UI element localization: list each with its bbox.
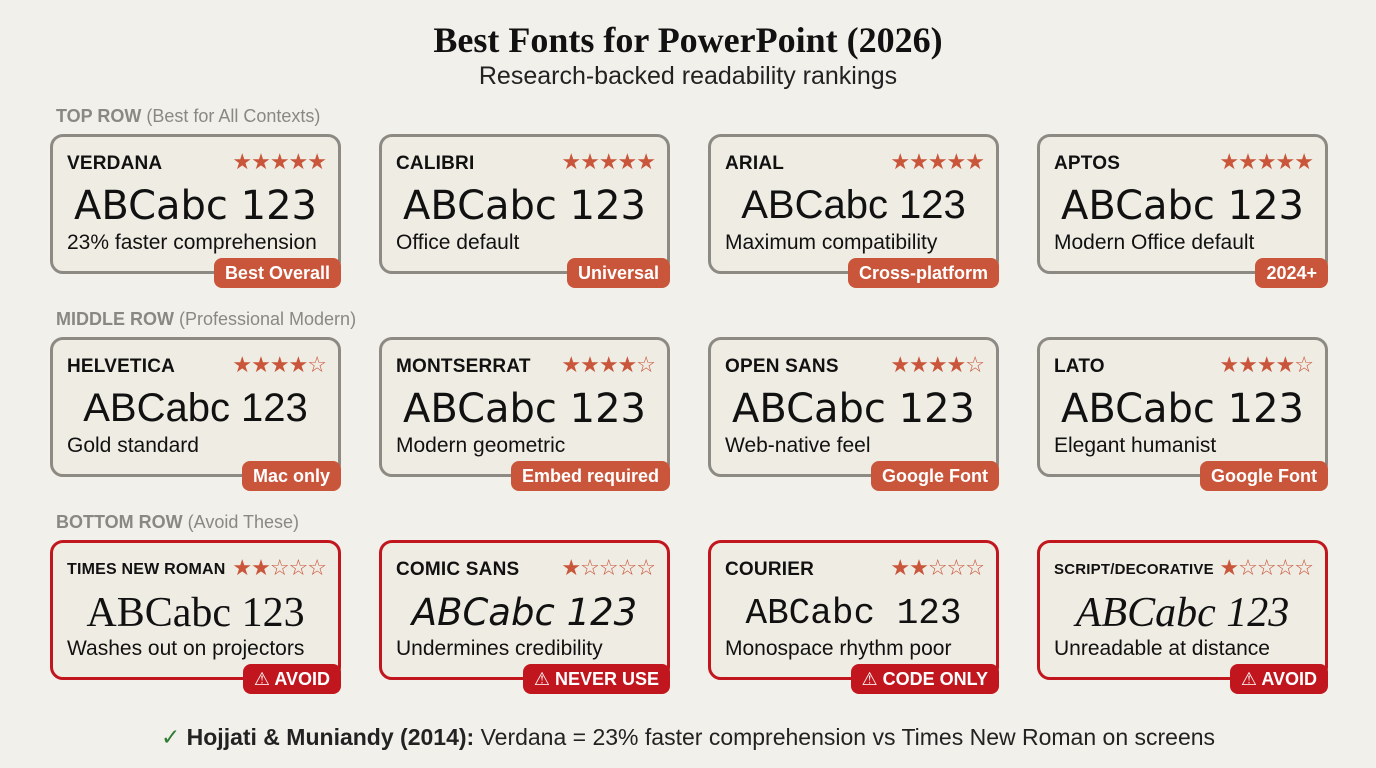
card: Verdana: VERDANA bbox=[67, 153, 162, 174]
card: Script/Decorative: SCRIPT/DECORATIVE bbox=[1054, 561, 1214, 578]
card: Montserrat: ABCabc 123 bbox=[403, 386, 646, 432]
card: Courier: COURIER bbox=[725, 559, 814, 580]
card: Script/Decorative bbox=[1037, 540, 1328, 680]
card: Lato: Elegant humanist bbox=[1054, 434, 1216, 457]
card: Arial: ★★★★★ bbox=[890, 149, 984, 174]
card: Calibri: ABCabc 123 bbox=[403, 183, 646, 229]
card: Verdana: ★★★★★ bbox=[232, 149, 326, 174]
card: Comic Sans: COMIC SANS bbox=[396, 559, 519, 580]
card: Open Sans: Google Font bbox=[882, 466, 988, 486]
card: Aptos: APTOS bbox=[1054, 153, 1120, 174]
row label: top: TOP ROW (Best for All Contexts) bbox=[56, 106, 320, 126]
card: Helvetica: Mac only bbox=[253, 466, 330, 486]
card: Calibri: Office default bbox=[396, 231, 519, 254]
card: Montserrat: Modern geometric bbox=[396, 434, 565, 457]
card: Helvetica: ★★★★☆ bbox=[232, 352, 326, 377]
card: Lato: ★★★★☆ bbox=[1219, 352, 1313, 377]
card: Aptos: ABCabc 123 bbox=[1061, 183, 1304, 229]
card: Calibri: Universal bbox=[578, 263, 659, 283]
card: Times New Roman: ABCabc 123 bbox=[86, 590, 305, 636]
card: Aptos: 2024+ bbox=[1266, 263, 1317, 283]
card: Arial: Cross-platform bbox=[859, 263, 988, 283]
card: Courier: ABCabc 123 bbox=[745, 593, 962, 634]
card: Aptos: ★★★★★ bbox=[1219, 149, 1313, 174]
card: Montserrat: MONTSERRAT bbox=[396, 356, 531, 377]
card: Times New Roman bbox=[50, 540, 341, 680]
footer citation: ✓ Hojjati & Muniandy (2014): Verdana = 23% faster comprehension vs Times New Roman on screens bbox=[161, 724, 1215, 750]
card: Lato: ABCabc 123 bbox=[1061, 386, 1304, 432]
card: Helvetica: HELVETICA bbox=[67, 356, 175, 377]
card: Open Sans: ★★★★☆ bbox=[890, 352, 984, 377]
card: Calibri bbox=[379, 134, 670, 274]
card: Lato: LATO bbox=[1054, 356, 1105, 377]
card: Arial: ABCabc 123 bbox=[741, 183, 966, 227]
card: Arial: ARIAL bbox=[725, 153, 784, 174]
card: Verdana: Best Overall bbox=[225, 263, 330, 283]
card: Calibri: ★★★★★ bbox=[561, 149, 655, 174]
card: Helvetica: ABCabc 123 bbox=[83, 386, 308, 430]
card: Verdana: ABCabc 123 bbox=[74, 183, 317, 229]
card: Comic Sans: ABCabc 123 bbox=[412, 591, 637, 634]
subtitle: Research-backed readability rankings bbox=[479, 62, 897, 90]
card: Times New Roman: TIMES NEW ROMAN bbox=[67, 561, 226, 578]
card: Verdana bbox=[50, 134, 341, 274]
card: Open Sans: Web-native feel bbox=[725, 434, 871, 457]
card: Comic Sans: ★☆☆☆☆ bbox=[561, 555, 655, 580]
card: Lato bbox=[1037, 337, 1328, 477]
card: Open Sans: OPEN SANS bbox=[725, 356, 839, 377]
card: Verdana: 23% faster comprehension bbox=[67, 231, 317, 254]
card: Helvetica: Gold standard bbox=[67, 434, 199, 457]
card: Aptos: Modern Office default bbox=[1054, 231, 1254, 254]
card: Courier: Monospace rhythm poor bbox=[725, 637, 951, 660]
card: Open Sans bbox=[708, 337, 999, 477]
card: Times New Roman: ★★☆☆☆ bbox=[232, 555, 326, 580]
row label: bottom: BOTTOM ROW (Avoid These) bbox=[56, 512, 299, 532]
card: Comic Sans: ⚠ NEVER USE bbox=[534, 669, 659, 689]
card: Courier: ★★☆☆☆ bbox=[890, 555, 984, 580]
card: Script/Decorative: ★☆☆☆☆ bbox=[1219, 555, 1313, 580]
card: Script/Decorative: Unreadable at distance bbox=[1054, 637, 1270, 660]
card: Arial bbox=[708, 134, 999, 274]
card: Comic Sans bbox=[379, 540, 670, 680]
card: Comic Sans: Undermines credibility bbox=[396, 637, 603, 660]
card: Open Sans: ABCabc 123 bbox=[732, 386, 975, 432]
card: Times New Roman: Washes out on projectors bbox=[67, 637, 304, 660]
card: Montserrat: ★★★★☆ bbox=[561, 352, 655, 377]
title: Best Fonts for PowerPoint (2026) bbox=[433, 20, 943, 60]
card: Times New Roman: ⚠ AVOID bbox=[254, 669, 330, 689]
card: Montserrat bbox=[379, 337, 670, 477]
card: Courier: ⚠ CODE ONLY bbox=[862, 669, 988, 689]
card: Script/Decorative: ⚠ AVOID bbox=[1241, 669, 1317, 689]
card: Montserrat: Embed required bbox=[522, 466, 659, 486]
card: Aptos bbox=[1037, 134, 1328, 274]
card: Script/Decorative: ABCabc 123 bbox=[1076, 590, 1289, 636]
card: Lato: Google Font bbox=[1211, 466, 1317, 486]
card: Helvetica bbox=[50, 337, 341, 477]
card: Arial: Maximum compatibility bbox=[725, 231, 937, 254]
card: Calibri: CALIBRI bbox=[396, 153, 474, 174]
row label: middle: MIDDLE ROW (Professional Modern) bbox=[56, 309, 356, 329]
card: Courier bbox=[708, 540, 999, 680]
